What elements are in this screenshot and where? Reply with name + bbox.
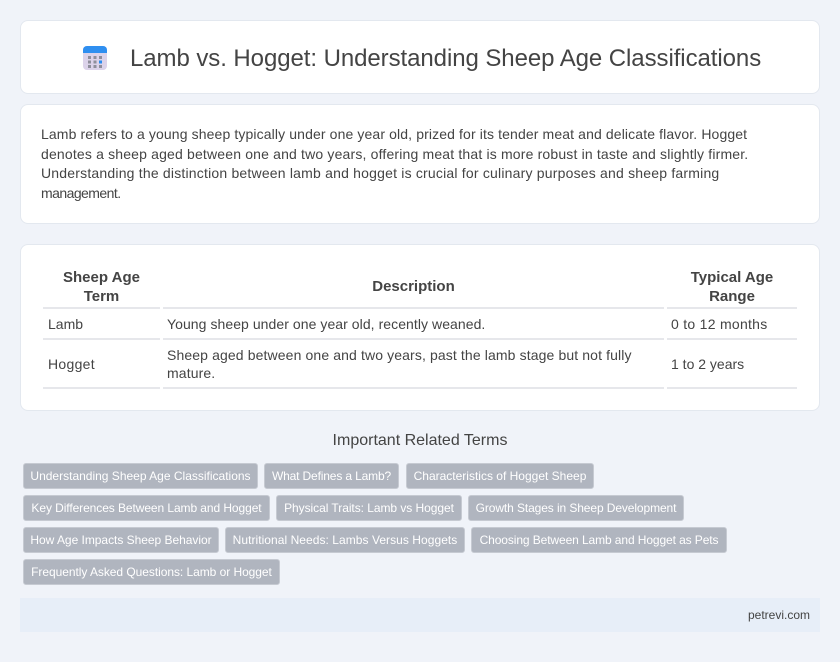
row: hogget description <box>167 347 632 381</box>
tag: Nutritional Needs: Lambs Versus Hoggets <box>233 533 457 547</box>
related terms heading: Important Related Terms <box>333 432 507 449</box>
tag: Growth Stages in Sheep Development <box>476 501 676 515</box>
row: hogget description: Sheep aged between one and two years, past the lamb stage but not fully <box>167 347 632 363</box>
intro text <box>41 126 748 201</box>
tag <box>225 527 465 553</box>
intro text: denotes a sheep aged between one and two years, offering meat that is more robust in taste and slightly firmer. <box>41 146 748 162</box>
table header: sheep age term: Term <box>84 288 119 305</box>
row: lamb description: Young sheep under one year old, recently weaned. <box>167 316 485 332</box>
row: lamb term: Lamb <box>48 316 83 332</box>
intro text: Understanding the distinction between lamb and hogget is crucial for culinary purposes and sheep farming <box>41 165 719 181</box>
tag: Frequently Asked Questions: Lamb or Hogget <box>31 565 272 579</box>
footer bar <box>20 598 820 632</box>
row: hogget description: mature. <box>167 365 215 381</box>
table header: typical age range: Typical Age <box>691 269 773 286</box>
icon: calendar <box>83 46 107 70</box>
table header: description: Description <box>372 278 455 295</box>
row: hogget term: Hogget <box>48 356 95 372</box>
tag: Understanding Sheep Age Classifications <box>30 469 251 483</box>
intro text: Lamb refers to a young sheep typically under one year old, prized for its tender meat and delicate flavor. Hogget <box>41 126 747 142</box>
tag: Physical Traits: Lamb vs Hogget <box>284 501 454 515</box>
tag <box>468 495 684 521</box>
tag <box>23 495 270 521</box>
row: lamb age: 0 to 12 months <box>671 316 768 332</box>
tag: What Defines a Lamb? <box>272 469 391 483</box>
tag: Key Differences Between Lamb and Hogget <box>31 501 262 515</box>
intro text panel <box>20 104 820 224</box>
title: Lamb vs. Hogget: Understanding Sheep Age Classifications <box>130 45 761 72</box>
table header: sheep age term <box>63 269 140 305</box>
tag <box>264 463 399 489</box>
footer brand: petrevi.com <box>748 608 810 622</box>
intro text: management. <box>41 184 121 200</box>
tag <box>23 463 258 489</box>
tag <box>406 463 594 489</box>
tag <box>276 495 462 521</box>
tag: Choosing Between Lamb and Hogget as Pets <box>480 533 718 547</box>
tag <box>471 527 727 553</box>
tag <box>23 559 280 585</box>
table header: typical age range: Range <box>709 288 755 305</box>
table header: typical age range <box>690 269 773 305</box>
row: hogget age: 1 to 2 years <box>671 356 744 372</box>
tag: Characteristics of Hogget Sheep <box>414 469 586 483</box>
related term tags <box>23 463 727 585</box>
tag <box>23 527 219 553</box>
comparison table panel <box>20 244 820 411</box>
header card <box>20 20 820 94</box>
tag: How Age Impacts Sheep Behavior <box>30 533 212 547</box>
table header: sheep age term: Sheep Age <box>63 269 140 286</box>
